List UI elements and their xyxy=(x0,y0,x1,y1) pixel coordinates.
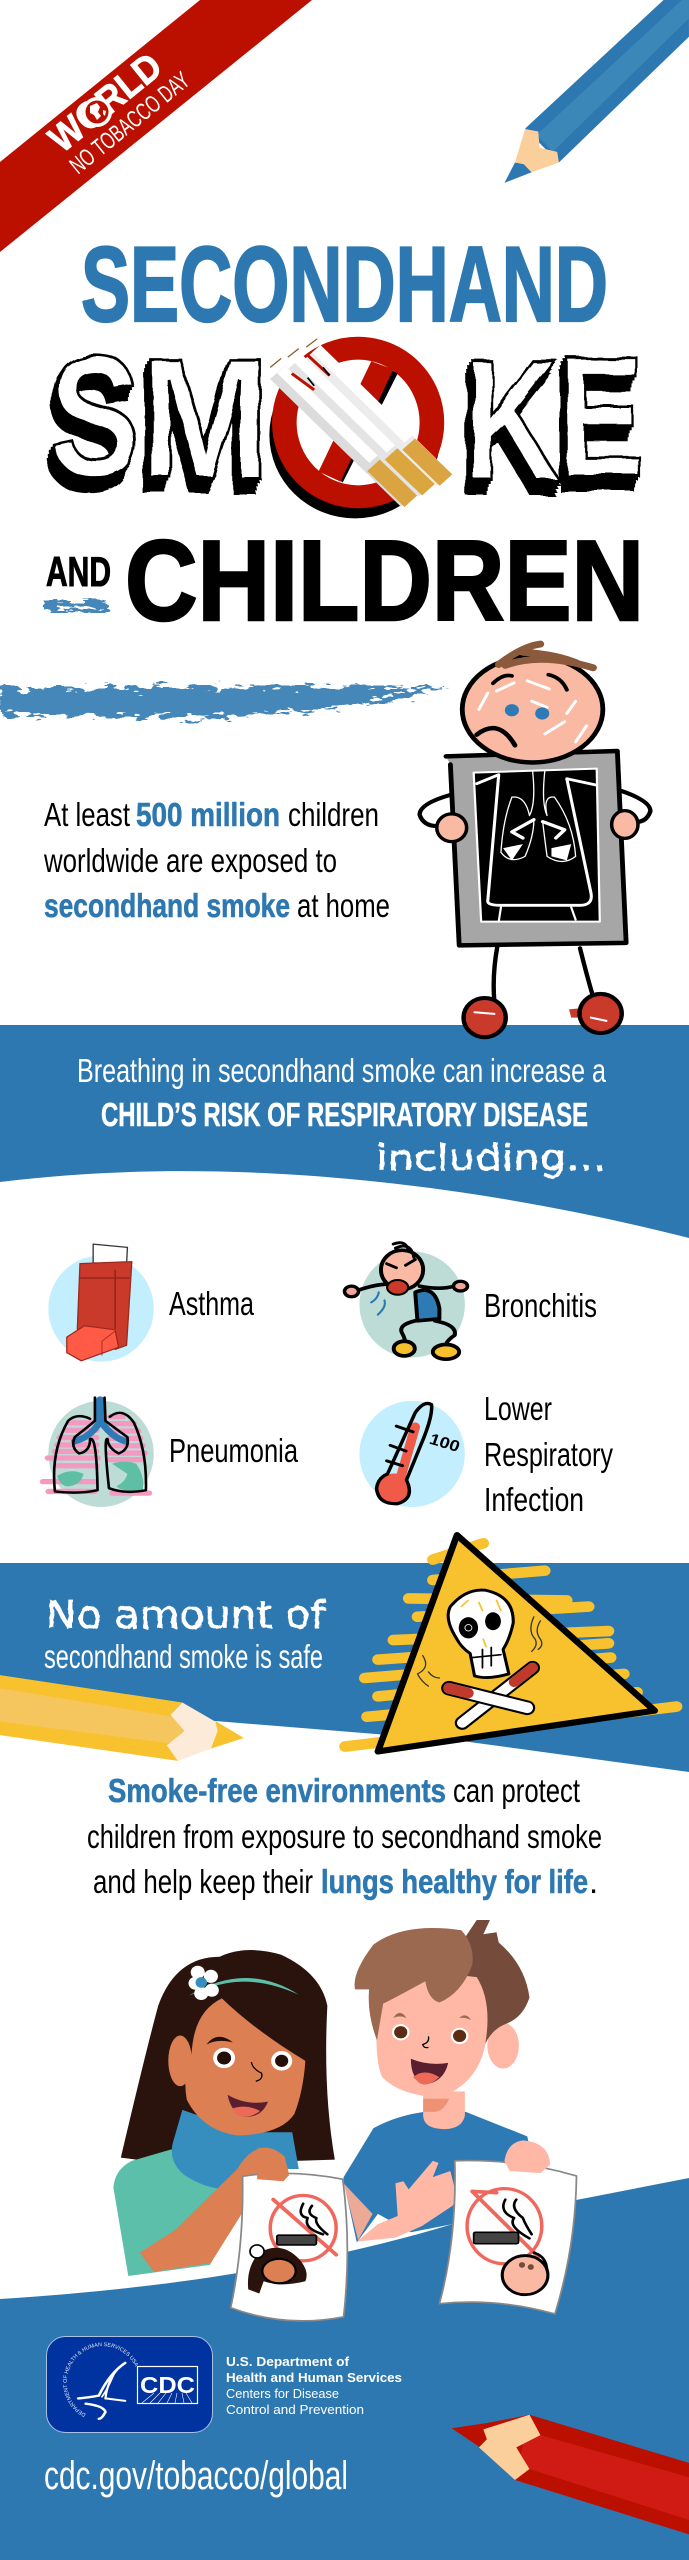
drawing held by girl xyxy=(231,2148,347,2321)
mouth xyxy=(228,2095,268,2117)
arms xyxy=(420,791,650,826)
smoke squiggles xyxy=(417,1617,542,1686)
eyebrows xyxy=(493,675,567,690)
statistic text: 500 million xyxy=(136,796,280,833)
label: Pneumonia: Pneumonia xyxy=(169,1432,298,1469)
title: Smoke letters K E xyxy=(464,321,644,517)
title: Smoke letters S M: S xyxy=(50,321,140,513)
label: Lower Respiratory Infection: Lower xyxy=(484,1390,552,1427)
eyes and brows xyxy=(392,2013,471,2048)
red pencil xyxy=(452,2415,689,2534)
x-ray frame xyxy=(446,751,626,945)
smoke-free text: lungs healthy for life xyxy=(321,1863,588,1900)
illustration: boy xyxy=(344,1920,545,2242)
logo: HHS and CDC xyxy=(46,2336,213,2433)
icon: pneumonia lungs xyxy=(43,1398,154,1507)
organization names: Control and Prevention xyxy=(226,2402,364,2417)
blue pencil xyxy=(504,0,689,183)
shirt xyxy=(344,2112,545,2242)
website address: cdc.gov/tobacco/global xyxy=(44,2454,348,2498)
arm xyxy=(140,2148,289,2272)
hair xyxy=(121,1950,335,2165)
legs xyxy=(494,946,593,1001)
icon: asthma inhaler xyxy=(48,1244,154,1362)
statistic text xyxy=(43,796,390,924)
scarf xyxy=(172,2110,299,2189)
body xyxy=(113,2149,242,2276)
ribbon text: WORLD: WORLD xyxy=(41,45,170,161)
panel: footer band xyxy=(0,2178,689,2560)
panel: no amount is safe band xyxy=(0,1563,689,1772)
face scribbles xyxy=(479,681,587,742)
smoke-free text: Smoke-free environments xyxy=(108,1772,446,1809)
cdc box xyxy=(138,2366,198,2404)
icon: eagle xyxy=(78,2363,125,2419)
eyes and brow xyxy=(207,2037,292,2081)
brush stroke under And xyxy=(44,601,107,610)
organization names: Centers for Disease xyxy=(226,2386,339,2401)
shoes xyxy=(464,994,622,1037)
icon: no smoking sign with cigarettes xyxy=(269,339,446,518)
title: And: AND xyxy=(46,548,111,595)
face xyxy=(376,1976,488,2098)
heading: No amount of: No amount of xyxy=(46,1593,327,1637)
title: Smoke letters K E: K xyxy=(464,325,560,517)
yellow pencil xyxy=(0,1675,244,1761)
back hair xyxy=(461,1920,529,2049)
brush stroke xyxy=(0,686,450,718)
ribbon: World No Tobacco Day xyxy=(0,0,312,252)
mouth xyxy=(477,728,515,745)
organization names xyxy=(226,2354,402,2417)
organization names: Health and Human Services xyxy=(226,2370,402,2385)
statistic text: secondhand smoke xyxy=(44,887,290,924)
icon: bronchitis child coughing xyxy=(344,1243,468,1359)
title: Smoke letters K E: E xyxy=(558,321,644,513)
statistic text: worldwide are exposed to xyxy=(43,842,337,879)
band text: including: including... xyxy=(376,1138,606,1179)
label: Lower Respiratory Infection: Respiratory xyxy=(484,1436,613,1473)
smoke-free text: can protect xyxy=(453,1772,580,1809)
icon: thermometer xyxy=(359,1401,465,1507)
face xyxy=(185,1998,305,2136)
illustration: girl xyxy=(113,1950,335,2276)
smoke-free text xyxy=(87,1772,602,1900)
hair xyxy=(499,644,593,668)
label: Asthma: Asthma xyxy=(169,1285,254,1322)
raised hand and arm xyxy=(357,2161,457,2242)
statistic text: at home xyxy=(297,887,390,924)
label: Bronchitis: Bronchitis xyxy=(484,1287,597,1324)
skull xyxy=(448,1590,513,1678)
title: Smoke letters S M xyxy=(50,321,270,515)
x-ray film xyxy=(474,769,600,922)
seal text: DEPARTMENT OF HEALTH & HUMAN SERVICES USA xyxy=(63,2342,138,2418)
illustration: boy holding x-ray xyxy=(420,644,650,1037)
head xyxy=(462,656,603,762)
ear xyxy=(487,2023,519,2069)
label on thermometer: 100: 100 xyxy=(427,1430,462,1456)
subheading: secondhand smoke is safe xyxy=(44,1638,323,1675)
crossed cigarettes xyxy=(449,1668,533,1723)
cdc text: CDC xyxy=(140,2372,195,2398)
smoke-free text: and help keep their xyxy=(93,1863,313,1900)
eyes xyxy=(505,704,549,720)
mouth xyxy=(411,2059,448,2085)
organization names: U.S. Department of xyxy=(226,2354,350,2369)
icon: warning triangle with skull xyxy=(345,1535,677,1751)
drawing held by boy xyxy=(439,2140,576,2314)
panel: respiratory disease band xyxy=(0,1025,689,1238)
ribbon text: No Tobacco Day: NO TOBACCO DAY xyxy=(65,67,195,180)
ear xyxy=(168,2036,192,2086)
neck xyxy=(423,2091,465,2129)
hands xyxy=(437,814,467,842)
label: Lower Respiratory Infection xyxy=(484,1390,613,1518)
yellow scribbles xyxy=(345,1543,677,1747)
icon: globe xyxy=(82,97,112,127)
statistic text: At least xyxy=(44,796,130,833)
flower xyxy=(189,1966,219,2000)
headband xyxy=(189,1978,299,1996)
statistic text: children xyxy=(288,796,379,833)
front hair xyxy=(355,1928,473,2040)
smoke-free text: . xyxy=(589,1863,598,1900)
title: Smoke letters S M: M xyxy=(140,323,270,515)
label: Lower Respiratory Infection: Infection xyxy=(484,1481,584,1518)
